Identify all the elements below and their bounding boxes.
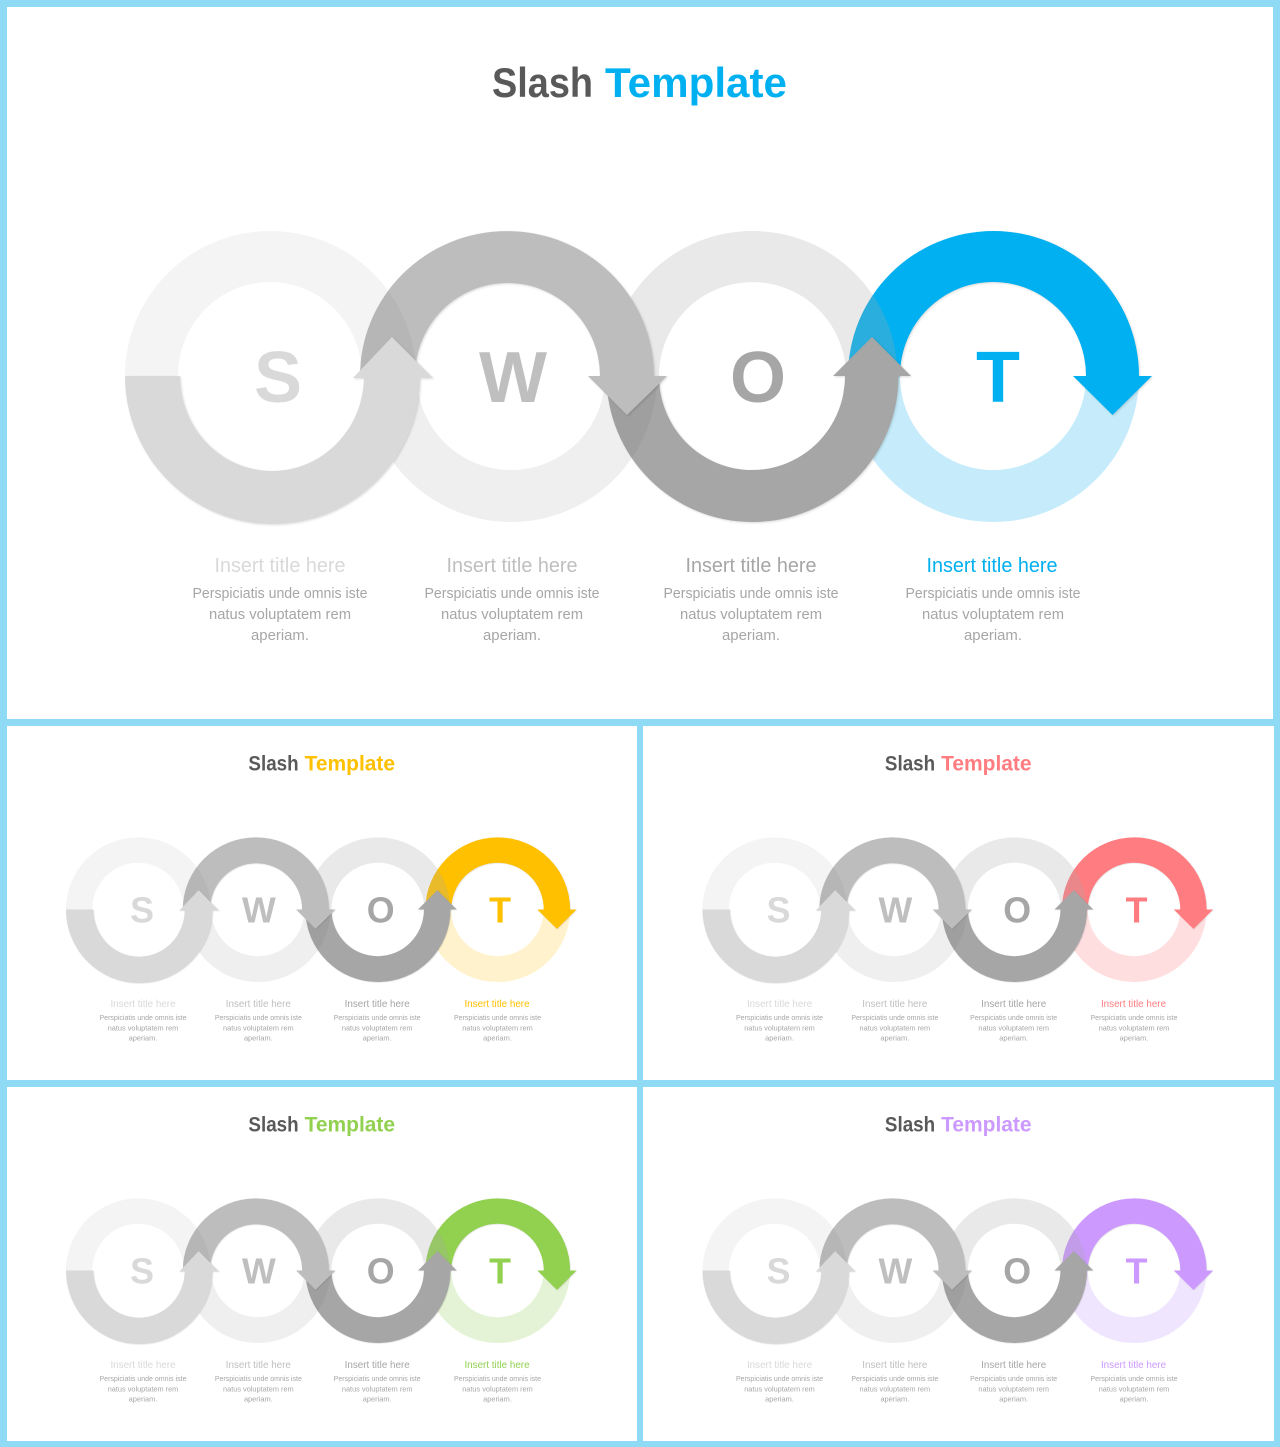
title: Template <box>605 59 787 106</box>
caption T: Perspiciatis unde omnis iste <box>1091 1374 1178 1383</box>
caption O: Perspiciatis unde omnis iste <box>970 1013 1057 1022</box>
W arrow arc <box>183 837 335 929</box>
letter W: W <box>878 1251 912 1291</box>
panel: red SWOT slide <box>643 726 1274 1080</box>
caption O: natus voluptatem rem <box>680 607 822 623</box>
letter S: S <box>767 890 790 930</box>
caption W: natus voluptatem rem <box>860 1023 930 1032</box>
O ring upper half <box>608 231 898 376</box>
caption W: Insert title here <box>446 555 578 577</box>
caption O: Insert title here <box>345 1360 410 1371</box>
caption T <box>906 555 1080 644</box>
caption S: natus voluptatem rem <box>744 1384 815 1393</box>
W arrow arc <box>819 1198 972 1290</box>
caption T: aperiam. <box>483 1034 512 1043</box>
panel: green SWOT slide <box>7 1087 637 1441</box>
W ring lower half <box>185 909 330 982</box>
W arrow arc <box>819 837 972 929</box>
swot ring chain <box>66 1198 577 1344</box>
caption S <box>192 555 368 644</box>
caption W: aperiam. <box>880 1034 909 1043</box>
W arrow arc <box>360 231 667 415</box>
caption O: Perspiciatis unde omnis iste <box>334 1013 421 1022</box>
T arrow arc <box>425 1198 577 1290</box>
caption T: natus voluptatem rem <box>1099 1023 1169 1032</box>
caption W: natus voluptatem rem <box>223 1384 294 1393</box>
S arrow arc <box>702 1251 856 1344</box>
letter T: T <box>1126 890 1148 930</box>
title <box>492 59 787 106</box>
T arrow arc <box>1062 1198 1213 1290</box>
caption S: Perspiciatis unde omnis iste <box>736 1374 823 1383</box>
caption O: aperiam. <box>722 628 780 644</box>
title: Template <box>305 753 395 776</box>
S ring upper half <box>702 837 847 909</box>
caption T: Insert title here <box>464 999 530 1010</box>
caption S <box>736 999 823 1043</box>
letter T: T <box>489 890 511 930</box>
O arrow arc <box>305 890 457 982</box>
title <box>248 1114 395 1137</box>
letter W: W <box>242 1251 276 1291</box>
caption T: natus voluptatem rem <box>462 1023 533 1032</box>
title: Slash <box>885 753 935 776</box>
caption T: Insert title here <box>464 1360 530 1371</box>
O ring upper half <box>306 1198 450 1270</box>
caption T <box>1091 1360 1178 1404</box>
caption S: Perspiciatis unde omnis iste <box>192 586 368 602</box>
caption T: aperiam. <box>964 628 1022 644</box>
caption W: Perspiciatis unde omnis iste <box>851 1374 938 1383</box>
S arrow arc <box>125 337 433 524</box>
S arrow arc <box>66 1251 219 1344</box>
caption T <box>454 1360 541 1404</box>
O arrow arc <box>305 1251 457 1343</box>
T ring lower half <box>847 376 1139 522</box>
caption W: Insert title here <box>226 999 291 1010</box>
caption S: Insert title here <box>747 1360 813 1371</box>
caption W: Insert title here <box>862 1360 928 1371</box>
caption S: Perspiciatis unde omnis iste <box>736 1013 823 1022</box>
swot ring chain <box>702 837 1213 983</box>
caption W <box>215 999 302 1043</box>
O arrow arc <box>942 890 1093 982</box>
caption O: aperiam. <box>363 1034 392 1043</box>
caption S: Perspiciatis unde omnis iste <box>100 1374 187 1383</box>
caption O: Perspiciatis unde omnis iste <box>334 1374 421 1383</box>
caption S: Insert title here <box>110 999 176 1010</box>
letter S: S <box>130 1251 154 1291</box>
letter O: O <box>730 338 786 418</box>
caption T: aperiam. <box>1120 1395 1148 1404</box>
caption O: natus voluptatem rem <box>342 1384 412 1393</box>
T ring lower half <box>425 1270 570 1343</box>
caption W: Perspiciatis unde omnis iste <box>851 1013 938 1022</box>
W arrow arc <box>183 1198 335 1290</box>
O arrow arc <box>606 337 911 522</box>
caption O: Perspiciatis unde omnis iste <box>970 1374 1057 1383</box>
T ring lower half <box>1061 1270 1207 1343</box>
T ring lower half <box>425 909 570 982</box>
caption T: Insert title here <box>926 555 1058 577</box>
O ring upper half <box>942 1198 1087 1270</box>
S arrow arc <box>66 890 219 983</box>
O ring upper half <box>942 837 1087 909</box>
T arrow arc <box>848 231 1152 415</box>
swot ring chain <box>66 837 577 983</box>
S ring upper half <box>702 1198 847 1270</box>
title: Template <box>941 1114 1032 1137</box>
caption S: natus voluptatem rem <box>744 1023 815 1032</box>
panel: main blue SWOT slide <box>7 7 1273 719</box>
caption W: natus voluptatem rem <box>441 607 583 623</box>
letter O: O <box>1003 1251 1031 1291</box>
caption W: aperiam. <box>244 1034 273 1043</box>
title <box>248 753 395 776</box>
caption W: aperiam. <box>880 1395 909 1404</box>
W ring lower half <box>822 909 967 982</box>
swot ring chain <box>125 231 1152 524</box>
title: Slash <box>885 1114 935 1137</box>
title: Slash <box>492 59 593 106</box>
caption W: Insert title here <box>862 999 928 1010</box>
caption O: natus voluptatem rem <box>978 1023 1049 1032</box>
caption S <box>100 1360 187 1404</box>
caption O <box>334 999 421 1043</box>
caption T: Insert title here <box>1101 999 1167 1010</box>
caption S: natus voluptatem rem <box>108 1384 178 1393</box>
O ring upper half <box>306 837 450 909</box>
letter W: W <box>242 890 276 930</box>
title <box>885 1114 1032 1137</box>
caption W: Perspiciatis unde omnis iste <box>424 586 600 602</box>
S ring upper half <box>66 1198 211 1270</box>
caption W: Perspiciatis unde omnis iste <box>215 1013 302 1022</box>
title: Template <box>941 753 1032 776</box>
caption S: aperiam. <box>765 1395 794 1404</box>
letter T: T <box>1126 1251 1148 1291</box>
caption O: Insert title here <box>686 555 816 577</box>
caption T: natus voluptatem rem <box>1099 1384 1169 1393</box>
O arrow arc <box>942 1251 1093 1343</box>
caption T: Insert title here <box>1101 1360 1167 1371</box>
caption T: aperiam. <box>1120 1034 1148 1043</box>
caption S: Insert title here <box>110 1360 176 1371</box>
panel: yellow SWOT slide <box>7 726 637 1080</box>
letter O: O <box>1003 890 1031 930</box>
caption S: Perspiciatis unde omnis iste <box>100 1013 187 1022</box>
caption W <box>851 999 938 1043</box>
letter O: O <box>367 890 395 930</box>
title: Slash <box>248 1114 299 1137</box>
letter S: S <box>254 338 302 418</box>
caption O: Insert title here <box>981 1360 1047 1371</box>
caption O: Insert title here <box>981 999 1047 1010</box>
caption T: Perspiciatis unde omnis iste <box>454 1013 541 1022</box>
caption S: aperiam. <box>129 1395 157 1404</box>
W ring lower half <box>822 1270 967 1343</box>
caption O: natus voluptatem rem <box>342 1023 412 1032</box>
caption S: aperiam. <box>129 1034 157 1043</box>
caption O: aperiam. <box>999 1395 1028 1404</box>
title: Slash <box>248 753 299 776</box>
title <box>885 753 1032 776</box>
caption O: aperiam. <box>363 1395 392 1404</box>
caption O: natus voluptatem rem <box>978 1384 1049 1393</box>
caption W: natus voluptatem rem <box>860 1384 930 1393</box>
caption T <box>454 999 541 1043</box>
caption O <box>970 1360 1057 1404</box>
caption W: natus voluptatem rem <box>223 1023 294 1032</box>
caption W: Insert title here <box>226 1360 291 1371</box>
caption W <box>215 1360 302 1404</box>
caption T: Perspiciatis unde omnis iste <box>906 586 1080 602</box>
caption W: aperiam. <box>483 628 541 644</box>
caption O <box>664 555 838 644</box>
caption S <box>736 1360 823 1404</box>
W ring lower half <box>365 376 657 522</box>
title: Template <box>305 1114 395 1137</box>
caption T <box>1091 999 1178 1043</box>
caption S: Insert title here <box>214 555 346 577</box>
letter T: T <box>489 1251 511 1291</box>
caption O <box>334 1360 421 1404</box>
T ring lower half <box>1061 909 1207 982</box>
S ring upper half <box>125 231 416 376</box>
caption W <box>851 1360 938 1404</box>
T arrow arc <box>1062 837 1213 929</box>
caption T: aperiam. <box>483 1395 512 1404</box>
panel: purple SWOT slide <box>643 1087 1274 1441</box>
letter S: S <box>130 890 154 930</box>
caption S: natus voluptatem rem <box>209 607 351 623</box>
caption O: Insert title here <box>345 999 410 1010</box>
S arrow arc <box>702 890 856 983</box>
caption W <box>424 555 600 644</box>
caption T: natus voluptatem rem <box>462 1384 533 1393</box>
T arrow arc <box>425 837 577 929</box>
swot ring chain <box>702 1198 1213 1344</box>
caption S: Insert title here <box>747 999 813 1010</box>
caption O: Perspiciatis unde omnis iste <box>664 586 838 602</box>
S ring upper half <box>66 837 211 909</box>
letter W: W <box>878 890 912 930</box>
caption S: aperiam. <box>765 1034 794 1043</box>
caption S: natus voluptatem rem <box>108 1023 178 1032</box>
caption W: Perspiciatis unde omnis iste <box>215 1374 302 1383</box>
letter T: T <box>976 338 1020 418</box>
caption S: aperiam. <box>251 628 309 644</box>
caption T: Perspiciatis unde omnis iste <box>1091 1013 1178 1022</box>
caption T: natus voluptatem rem <box>922 607 1064 623</box>
caption T: Perspiciatis unde omnis iste <box>454 1374 541 1383</box>
W ring lower half <box>185 1270 330 1343</box>
caption O: aperiam. <box>999 1034 1028 1043</box>
caption W: aperiam. <box>244 1395 273 1404</box>
letter O: O <box>367 1251 395 1291</box>
letter S: S <box>767 1251 790 1291</box>
caption O <box>970 999 1057 1043</box>
letter W: W <box>479 338 547 418</box>
caption S <box>100 999 187 1043</box>
